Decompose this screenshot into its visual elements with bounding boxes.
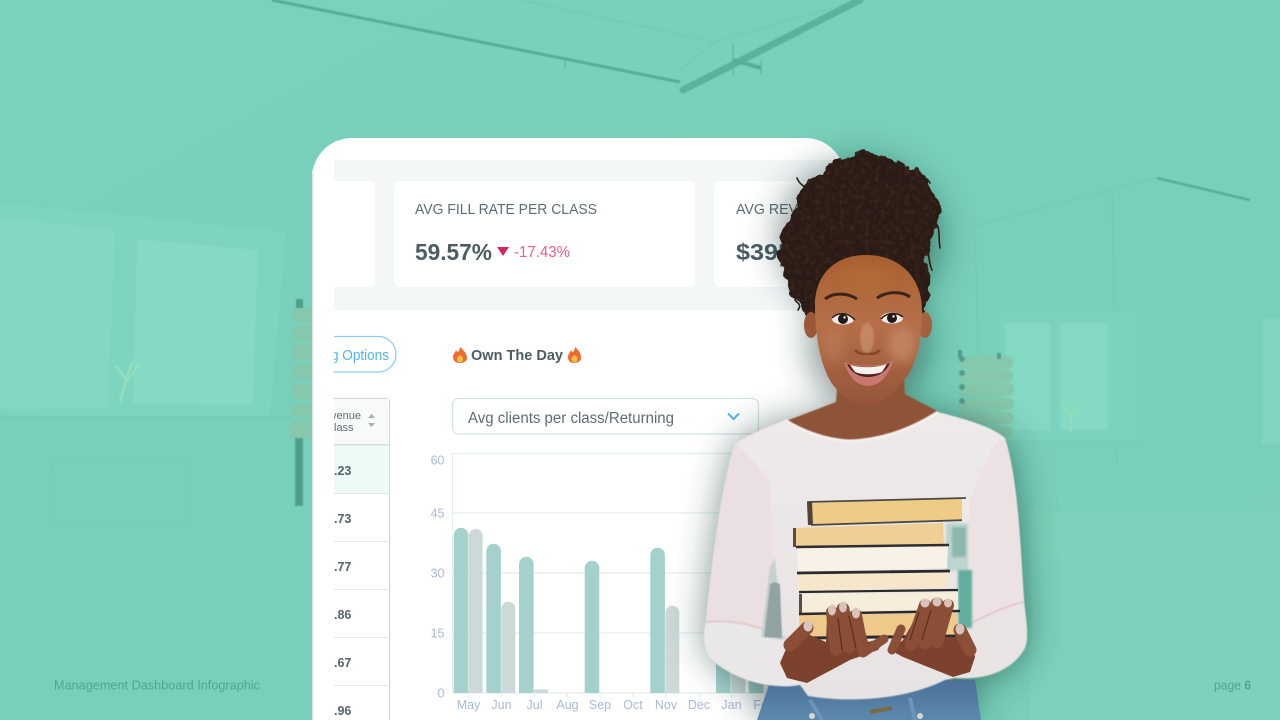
KPI card: cropped left	[334, 181, 375, 287]
bars: first series	[454, 528, 763, 693]
book 3	[797, 546, 948, 572]
right floor	[1030, 512, 1280, 720]
leaderboard table: venue	[331, 410, 361, 422]
bars: second series	[469, 529, 745, 693]
x axis labels: Oct	[623, 698, 643, 712]
leaderboard table: .73	[334, 512, 351, 526]
book 2	[793, 523, 944, 547]
x axis labels: Jan	[721, 698, 742, 712]
footer: document title: Management Dashboard Infographic	[54, 678, 260, 692]
left towel rack	[295, 438, 303, 506]
book 6	[799, 613, 958, 638]
left plant	[116, 362, 140, 402]
dropdown: metric selector	[452, 398, 758, 434]
cheek highlights	[888, 327, 916, 363]
x axis labels: May	[457, 698, 481, 712]
left sleeve tint	[706, 444, 773, 640]
dashboard panel	[290, 138, 850, 720]
ears	[804, 312, 818, 338]
leaderboard table: .23	[334, 464, 351, 478]
left radiator	[52, 458, 185, 528]
leaderboard table: lass	[334, 422, 354, 434]
hair stray curls	[792, 150, 940, 310]
KPI card: avg revenue: $395	[736, 239, 792, 265]
icon: chevron	[728, 414, 739, 419]
gap between arm and torso showing chart	[761, 558, 783, 640]
ceiling rail and pipe	[272, 0, 860, 90]
right plant	[1062, 404, 1079, 432]
right towel rack	[958, 356, 1014, 438]
stack of books	[793, 498, 969, 638]
KPI card: avg fill rate: AVG FILL RATE PER CLASS	[415, 201, 597, 218]
book 1	[807, 498, 968, 525]
icon: flame right	[568, 347, 581, 363]
jeans	[757, 680, 981, 720]
open smile	[844, 361, 893, 386]
x axis labels: Nov	[655, 698, 678, 712]
KPI card: avg revenue: AVG REV	[736, 201, 798, 218]
lower left sleeve	[704, 620, 800, 686]
person holding books	[704, 150, 1027, 720]
KPI card: avg fill rate	[394, 181, 695, 287]
eyebrows	[825, 294, 857, 299]
x axis labels: Dec	[688, 698, 710, 712]
book 5	[799, 592, 958, 614]
leaderboard table: .86	[334, 608, 351, 622]
KPI card: avg fill rate: -17.43%	[514, 244, 570, 261]
ceiling panel lines	[520, 0, 860, 70]
footer: page number: page 6	[1214, 678, 1251, 692]
right hand	[890, 598, 975, 677]
collar	[785, 412, 938, 441]
x axis labels	[458, 700, 763, 712]
y axis labels: 60	[431, 454, 445, 468]
x axis labels: Feb	[753, 698, 775, 712]
x axis labels: Jun	[491, 698, 512, 712]
bar chart: monthly clients per class	[430, 453, 766, 712]
eye right	[881, 312, 903, 324]
gap beside books	[946, 523, 972, 628]
KPI strip	[300, 160, 850, 310]
hair bun	[778, 150, 940, 322]
person drop shadow	[704, 162, 1027, 720]
x axis labels: Aug	[556, 698, 579, 712]
icon: sort arrows	[368, 414, 375, 427]
heading: own the day: Own The Day	[471, 347, 564, 364]
leaderboard table: .67	[334, 656, 351, 670]
y axis labels: 45	[431, 506, 445, 520]
book 4	[797, 572, 948, 591]
nose	[860, 323, 874, 353]
button: sorting options	[334, 336, 397, 373]
y axis labels: 30	[431, 566, 445, 580]
y axis labels: 15	[431, 626, 445, 640]
KPI card: avg fill rate: 59.57%	[415, 239, 492, 265]
leaderboard table: .77	[334, 560, 351, 574]
KPI card: avg revenue	[714, 181, 806, 287]
button: sorting options: g Options	[331, 348, 389, 364]
right window	[1000, 312, 1136, 444]
dropdown: metric selector: Avg clients per class/Returning	[468, 410, 674, 427]
neck	[786, 372, 939, 441]
icon: flame left	[453, 347, 467, 363]
head	[804, 255, 932, 405]
leaderboard table: .96	[334, 704, 351, 718]
right ceiling bar	[1157, 178, 1250, 200]
face	[815, 255, 922, 405]
eye left	[832, 314, 855, 324]
left hand	[780, 602, 887, 683]
x axis labels: Jul	[527, 698, 542, 712]
left window frame	[0, 203, 286, 418]
x axis labels: Sep	[589, 698, 611, 712]
long sleeve shirt	[704, 412, 1027, 699]
right sleeve tint	[968, 438, 1024, 625]
leaderboard table	[300, 398, 390, 720]
sleeve folds	[706, 602, 1024, 640]
y axis labels: 0	[438, 686, 445, 700]
y axis labels	[431, 454, 445, 700]
right radiator	[1057, 465, 1127, 510]
